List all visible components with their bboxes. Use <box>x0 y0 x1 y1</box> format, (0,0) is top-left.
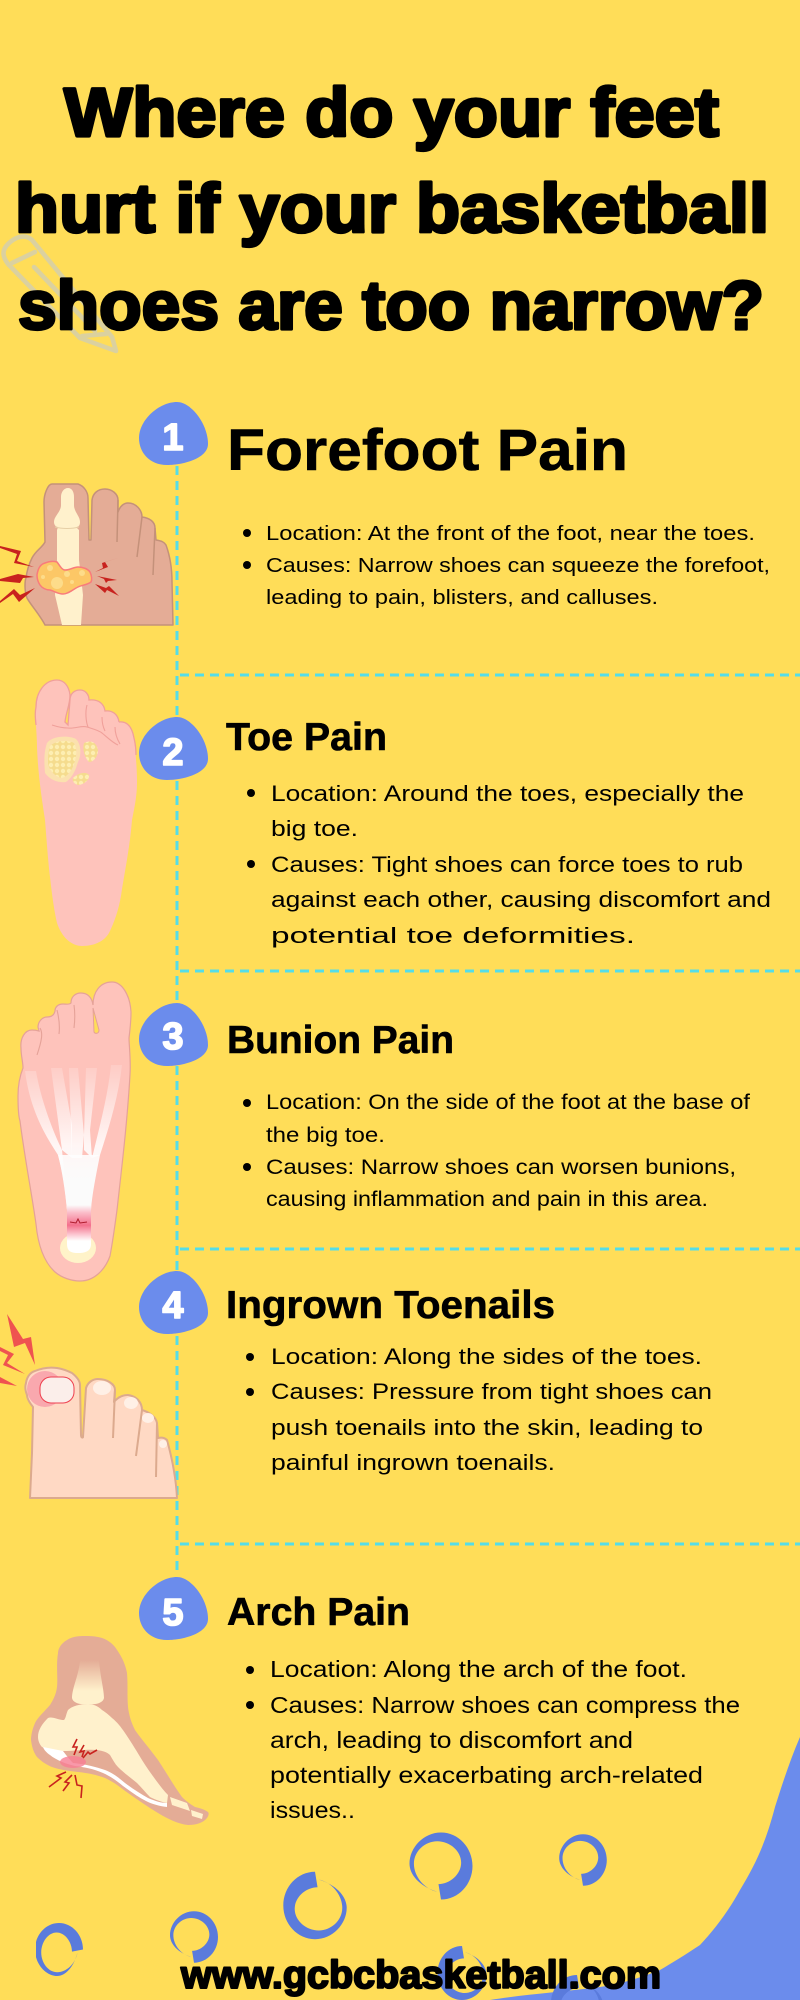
website footer: www.gcbcbasketball.com <box>180 1954 661 1997</box>
text: forefoot details <box>243 523 770 609</box>
text: ingrown toenails details: push toenails into the skin, leading to <box>271 1415 703 1440</box>
text: toe pain details: Causes: Tight shoes can force toes to rub <box>271 852 743 877</box>
title: shoes are too narrow? <box>18 267 764 344</box>
text: bunion pain details: the big toe. <box>266 1124 385 1147</box>
text: arch pain details: potentially exacerbating arch-related <box>270 1762 703 1788</box>
text: arch pain details: Location: Along the arch of the foot. <box>270 1656 687 1682</box>
text: toe pain details <box>247 781 771 948</box>
background blue wave <box>490 1737 800 2000</box>
badge 2 <box>139 717 208 780</box>
panel: arch pain <box>31 1577 740 1825</box>
text: forefoot details: Causes: Narrow shoes can squeeze the forefoot, <box>266 555 770 577</box>
badge 4 <box>139 1271 208 1334</box>
badge 4: 4 <box>162 1285 184 1327</box>
title: hurt if your basketball <box>15 170 769 247</box>
heading: arch pain: Arch Pain <box>227 1591 410 1634</box>
icon: ingrown toenail <box>0 1314 177 1498</box>
text: toe pain details: potential toe deformities. <box>271 923 635 948</box>
icon: pencil watermark <box>4 237 116 351</box>
text: toe pain details: Location: Around the toes, especially the <box>271 781 744 806</box>
text: ingrown toenails details: Location: Along the sides of the toes. <box>271 1344 702 1369</box>
badge 1: 1 <box>162 417 184 459</box>
badge 5 <box>139 1577 208 1640</box>
text: bunion pain details: causing inflammation and pain in this area. <box>266 1188 708 1211</box>
text: bunion pain details: Location: On the side of the foot at the base of <box>266 1091 750 1114</box>
heading: ingrown toenails: Ingrown Toenails <box>226 1284 555 1327</box>
title: Where do your feet <box>64 74 719 151</box>
badge 3 <box>139 1003 208 1066</box>
text: bunion pain details <box>243 1091 750 1211</box>
text: forefoot details: Location: At the front of the foot, near the toes. <box>266 523 755 545</box>
panel: bunion pain <box>18 982 750 1281</box>
text: arch pain details <box>246 1656 740 1823</box>
icon: foot side cross-section <box>31 1636 209 1825</box>
text: arch pain details: arch, leading to discomfort and <box>270 1727 633 1753</box>
text: ingrown toenails details <box>246 1344 712 1475</box>
text: ingrown toenails details: Causes: Pressure from tight shoes can <box>271 1379 712 1404</box>
panel: toe pain <box>35 680 771 948</box>
icon: foot with plantar fascia tear <box>18 982 131 1281</box>
decorative rings <box>35 1832 607 2000</box>
heading: bunion pain: Bunion Pain <box>227 1019 454 1062</box>
text: arch pain details: Causes: Narrow shoes can compress the <box>270 1692 740 1718</box>
badge 2: 2 <box>162 732 184 774</box>
heading: toe pain: Toe Pain <box>226 716 387 759</box>
text: arch pain details: issues.. <box>270 1797 355 1823</box>
panel: ingrown toenails <box>0 1271 712 1498</box>
icon: bunion on foot <box>0 484 173 625</box>
text: forefoot details: leading to pain, blisters, and calluses. <box>266 587 658 609</box>
badge 5: 5 <box>162 1592 184 1634</box>
text: toe pain details: big toe. <box>271 816 358 841</box>
title <box>15 74 769 344</box>
text: toe pain details: against each other, causing discomfort and <box>271 887 771 912</box>
panel: forefoot pain <box>0 402 770 625</box>
text: bunion pain details: Causes: Narrow shoes can worsen bunions, <box>266 1156 736 1179</box>
heading: forefoot pain: Forefoot Pain <box>227 418 628 483</box>
badge 1 <box>139 402 208 465</box>
text: ingrown toenails details: painful ingrown toenails. <box>271 1450 555 1475</box>
icon: sole with calluses <box>35 680 137 946</box>
badge 3: 3 <box>162 1016 184 1058</box>
